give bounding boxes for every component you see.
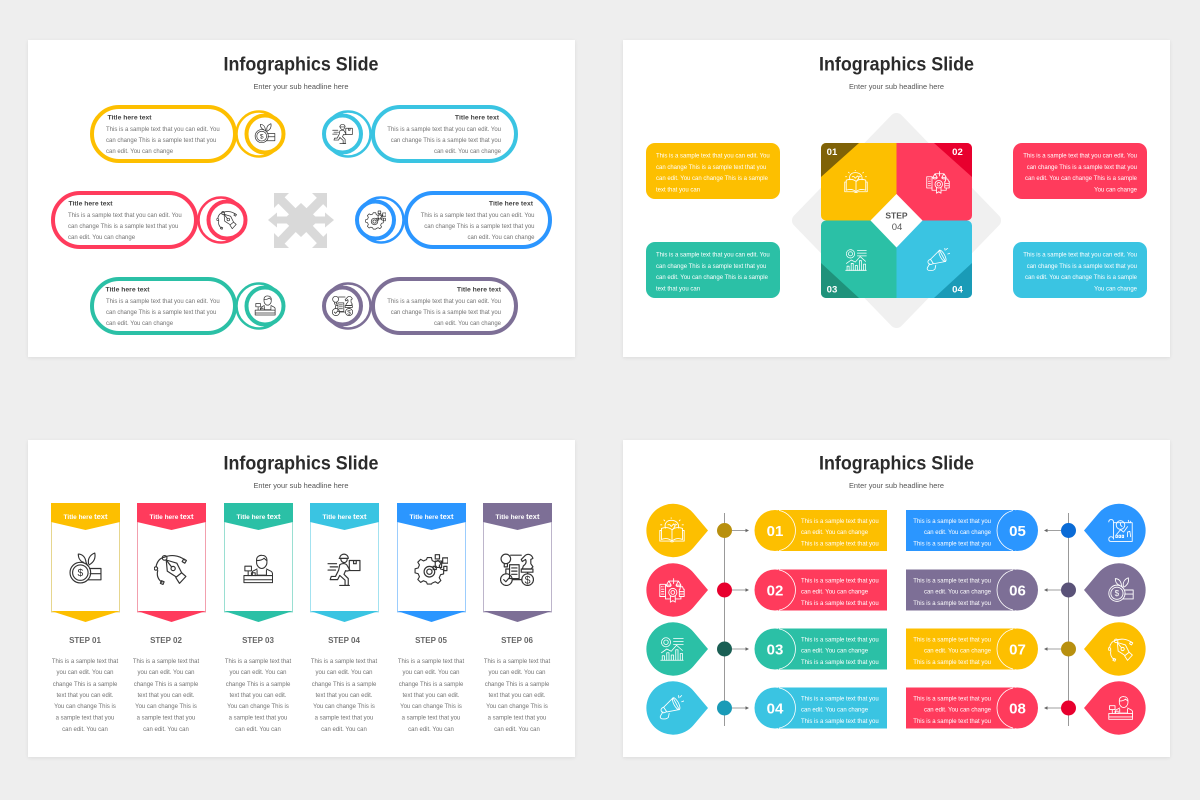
item: red pill: can edit. You can change (68, 235, 136, 241)
step 02: a sample text that you (137, 716, 195, 722)
center diamond (870, 194, 922, 248)
sub headline: Enter your sub headline here (254, 481, 348, 490)
step 05: can edit. You can (408, 727, 454, 733)
row 03 (646, 622, 887, 676)
step 02: This is a sample text that (133, 659, 200, 665)
row 05: This is a sample text that you (913, 542, 991, 548)
item: yellow pill (92, 107, 284, 161)
step 02: change This is a sample (134, 682, 199, 688)
text box: red: can change This is a sample text that you (1027, 165, 1137, 171)
quadrant 02 (896, 143, 972, 220)
step 02: STEP 02 (150, 636, 182, 645)
step 04 (310, 503, 379, 733)
step 05: a sample text that you (402, 716, 460, 722)
step 03: Title here text (237, 512, 281, 521)
item: red pill: Title here text (68, 200, 113, 208)
quadrant 03 (821, 220, 896, 298)
step 04: text that you can edit. (315, 693, 373, 699)
step 04: you can edit. You can (315, 670, 373, 676)
step 06: text that you can edit. (488, 693, 546, 699)
row 02: This is a sample text that you (801, 578, 879, 584)
step 03: can edit. You can (235, 727, 281, 733)
row 07 (906, 622, 1146, 676)
step 01: you can edit. You can (56, 670, 114, 676)
step 03: This is a sample text that (225, 659, 292, 665)
step 04: STEP 04 (328, 636, 360, 645)
step 03: a sample text that you (229, 716, 287, 722)
panel: four-step diamond (623, 40, 1170, 357)
row 07: This is a sample text that you (913, 660, 991, 666)
step 01 (51, 503, 120, 733)
step 05: Title here text (410, 512, 454, 521)
row 07: can edit. You can change (924, 648, 992, 654)
step 03: text that you can edit. (229, 693, 287, 699)
row 04: can edit. You can change (801, 708, 869, 714)
step 01: Title here text (64, 512, 108, 521)
text box: red: This is a sample text that you can edit. You (1023, 154, 1137, 160)
quadrant 01 (821, 143, 896, 220)
row 05 (906, 504, 1146, 557)
text box: red: can edit. You can change This is a sample (1025, 176, 1138, 182)
row 03: This is a sample text that you (801, 660, 879, 666)
row 06: can edit. You can change (924, 590, 992, 596)
step 05: you can edit. You can (402, 670, 460, 676)
step 01: text that you can edit. (56, 693, 114, 699)
diamond backdrop (799, 120, 994, 321)
right vertical line (1068, 513, 1069, 726)
item: purple pill (324, 279, 516, 333)
item: purple pill: Title here text (457, 286, 502, 294)
row 03: can edit. You can change (801, 648, 869, 654)
heading: Infographics Slide (819, 452, 974, 474)
row 08: 08 (1009, 700, 1026, 718)
arrows: central gray burst (268, 193, 334, 248)
item: blue pill: Title here text (489, 200, 534, 208)
center diamond: STEP (885, 210, 908, 220)
step 01: This is a sample text that (52, 659, 119, 665)
quadrant 04: 04 (952, 284, 963, 296)
step 04: This is a sample text that (311, 659, 378, 665)
step 04: change This is a sample (312, 682, 377, 688)
text box: red (1013, 143, 1147, 199)
row 03: This is a sample text that you (801, 638, 879, 644)
text box: teal: text that you can (656, 286, 700, 292)
text box: yellow (646, 143, 780, 199)
row 07: This is a sample text that you (913, 638, 991, 644)
item: red pill: can change This is a sample text that you (68, 224, 178, 230)
row 08: can edit. You can change (924, 708, 992, 714)
item: purple pill: This is a sample text that you can edit. You (387, 299, 501, 305)
item: cyan pill (324, 107, 516, 161)
step 03: change This is a sample (226, 682, 291, 688)
step 03: You can change This is (227, 704, 289, 710)
sub headline: Enter your sub headline here (849, 82, 944, 91)
step 05: You can change This is (400, 704, 462, 710)
item: cyan pill: Title here text (455, 114, 500, 122)
step 06: you can edit. You can (488, 670, 546, 676)
row 01 (646, 504, 887, 557)
sub headline: Enter your sub headline here (849, 481, 944, 490)
text box: cyan: can edit. You can change This is a sample (1025, 275, 1138, 281)
row 01: This is a sample text that you (801, 542, 879, 548)
text box: cyan (1013, 242, 1147, 298)
step 06: This is a sample text that (484, 659, 551, 665)
quadrant 01: 01 (827, 147, 838, 158)
row 07: 07 (1009, 642, 1026, 658)
text box: cyan: This is a sample text that you can edit. You (1023, 252, 1137, 258)
step 04: Title here text (323, 512, 367, 521)
row 01: can edit. You can change (801, 530, 869, 536)
item: yellow pill: Title here text (108, 114, 152, 122)
step 05: STEP 05 (415, 636, 447, 645)
row 01: 01 (767, 523, 783, 540)
row 08 (906, 681, 1146, 735)
step 06: change This is a sample (485, 682, 550, 688)
item: teal pill: can change This is a sample text that you (106, 310, 216, 316)
step 01: can edit. You can (62, 727, 108, 733)
row 05: can edit. You can change (924, 530, 992, 536)
item: teal pill: This is a sample text that you can edit. You (106, 299, 220, 305)
text box: cyan: can change This is a sample text that you (1027, 264, 1137, 270)
row 05: This is a sample text that you (913, 519, 991, 525)
item: blue pill (357, 193, 550, 247)
step 06 (483, 503, 552, 733)
step 01: a sample text that you (56, 716, 114, 722)
step 03 (224, 503, 293, 733)
step 05: text that you can edit. (402, 693, 460, 699)
heading: Infographics Slide (224, 452, 379, 474)
step 02 (133, 503, 206, 733)
text box: cyan: You can change (1094, 286, 1138, 292)
text box: yellow: This is a sample text that you can edit. You (656, 154, 770, 160)
row 04: This is a sample text that you (801, 696, 879, 702)
row 06: This is a sample text that you (913, 601, 991, 607)
row 02: can edit. You can change (801, 590, 869, 596)
step 02: You can change This is (135, 704, 197, 710)
step 05 (397, 503, 466, 733)
row 06 (906, 563, 1146, 617)
text box: yellow: can change This is a sample text that you (656, 165, 766, 171)
item: yellow pill: can change This is a sample text that you (106, 138, 216, 144)
item: blue pill: This is a sample text that you can edit. You (421, 213, 534, 219)
step 01: You can change This is (54, 704, 116, 710)
step 04: can edit. You can (321, 727, 367, 733)
row 05: 05 (1009, 523, 1026, 540)
step 03: you can edit. You can (229, 670, 287, 676)
item: yellow pill: This is a sample text that you can edit. You (106, 127, 220, 133)
row 01: This is a sample text that you (801, 519, 879, 525)
heading: Infographics Slide (224, 54, 379, 76)
step 02: Title here text (150, 512, 194, 521)
row 02: This is a sample text that you (801, 601, 879, 607)
text box: teal: This is a sample text that you can edit. You (656, 252, 770, 258)
item: teal pill: Title here text (106, 286, 150, 294)
item: purple pill: can change This is a sample text that you (391, 310, 501, 316)
quadrant 02: 02 (952, 147, 963, 158)
item: teal pill: can edit. You can change (106, 321, 174, 327)
step 02: can edit. You can (143, 727, 189, 733)
text box: teal: can change This is a sample text that you (656, 264, 766, 270)
sub headline: Enter your sub headline here (254, 82, 348, 91)
step 05: This is a sample text that (398, 659, 465, 665)
step 02: text that you can edit. (137, 693, 195, 699)
center diamond: 04 (892, 222, 902, 233)
step 03: STEP 03 (242, 636, 274, 645)
step 06: STEP 06 (501, 636, 533, 645)
heading: Infographics Slide (819, 54, 974, 76)
row 02: 02 (767, 582, 783, 600)
item: purple pill: can edit. You can change (434, 321, 502, 327)
row 03: 03 (767, 642, 783, 658)
item: cyan pill: This is a sample text that you can edit. You (387, 127, 501, 133)
left vertical line (724, 513, 725, 726)
row 08: This is a sample text that you (913, 696, 991, 702)
row 04 (646, 681, 887, 735)
item: red pill: This is a sample text that you can edit. You (68, 213, 182, 219)
panel: pill infographic (28, 40, 575, 357)
text box: yellow: can edit. You can change This is a sample (656, 176, 769, 182)
step 06: a sample text that you (488, 716, 546, 722)
panel: eight-item timeline (623, 440, 1170, 757)
item: cyan pill: can edit. You can change (434, 149, 502, 155)
step 01: STEP 01 (69, 636, 101, 645)
row 08: This is a sample text that you (913, 719, 991, 725)
item: blue pill: can change This is a sample text that you (424, 224, 534, 230)
step 05: change This is a sample (399, 682, 464, 688)
text box: teal (646, 242, 780, 298)
item: teal pill (92, 279, 284, 333)
row 04: 04 (767, 700, 784, 718)
row 04: This is a sample text that you (801, 719, 879, 725)
step 06: can edit. You can (494, 727, 540, 733)
step 01: change This is a sample (53, 682, 118, 688)
row 02 (646, 563, 887, 617)
panel: six-step banners (28, 440, 575, 757)
text box: teal: can edit. You can change This is a sample (656, 275, 769, 281)
step 04: You can change This is (313, 704, 375, 710)
quadrant 03: 03 (827, 284, 837, 296)
row 06: 06 (1009, 582, 1026, 600)
step 02: you can edit. You can (137, 670, 195, 676)
step 04: a sample text that you (315, 716, 373, 722)
text box: red: You can change (1094, 188, 1138, 194)
item: cyan pill: can change This is a sample text that you (391, 138, 501, 144)
item: yellow pill: can edit. You can change (106, 149, 174, 155)
row 06: This is a sample text that you (913, 578, 991, 584)
quadrant 04 (896, 220, 972, 298)
text box: yellow: text that you can (656, 188, 700, 194)
item: red pill (53, 193, 246, 247)
step 06: Title here text (496, 512, 540, 521)
item: blue pill: can edit. You can change (467, 235, 535, 241)
step 06: You can change This is (486, 704, 548, 710)
